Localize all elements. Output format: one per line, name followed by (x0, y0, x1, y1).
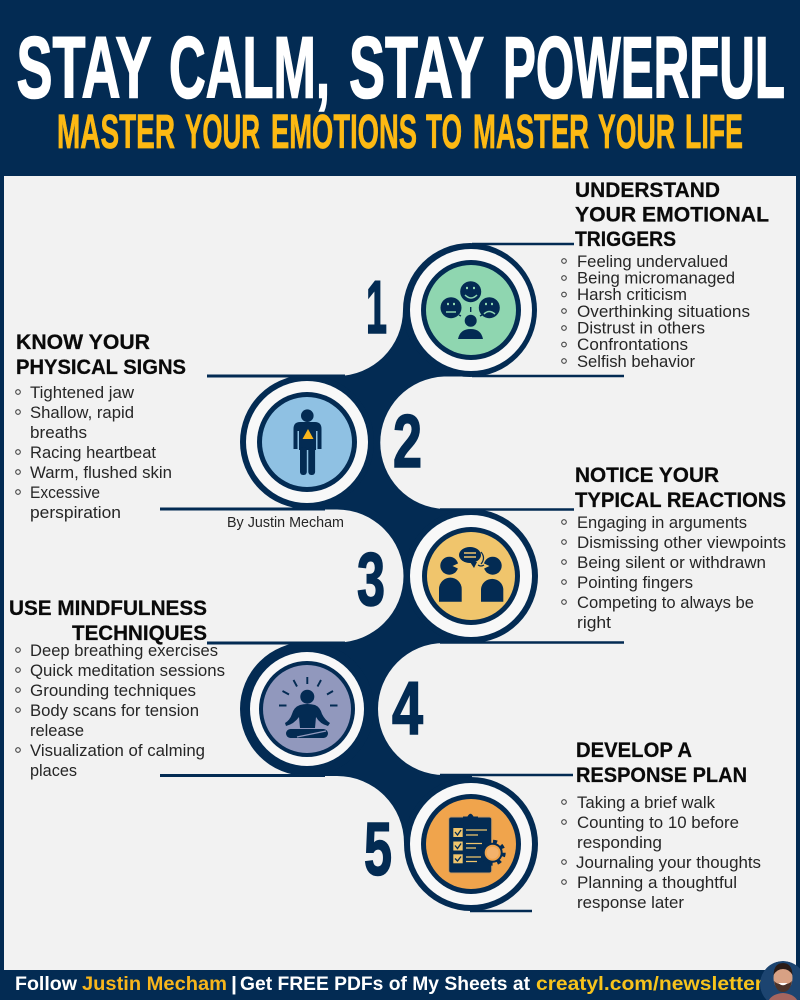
list: typical reactions: Dismissing other viewpoints (577, 534, 786, 552)
list: physical signs (16, 384, 172, 522)
list: typical reactions: Competing to always be (577, 594, 754, 612)
step 5 medallion (404, 777, 538, 911)
heading: understand your emotional triggers (575, 179, 769, 251)
heading: use mindfulness techniques: TECHNIQUES (72, 622, 207, 645)
serpentine connector (5, 244, 795, 911)
heading: notice your typical reactions: TYPICAL REACTIONS (575, 489, 786, 512)
list: physical signs: breaths (30, 424, 87, 442)
number 3: 3 (357, 537, 385, 621)
heading: use mindfulness techniques: USE MINDFULNESS (9, 597, 207, 620)
number 4: 4 (392, 666, 423, 750)
list: typical reactions: right (577, 614, 611, 632)
number 2: 2 (393, 399, 422, 483)
title (16, 20, 785, 116)
heading: understand your emotional triggers: TRIGGERS (575, 228, 676, 251)
main panel background (4, 176, 796, 970)
list: mindfulness techniques: Grounding techniques (30, 682, 196, 700)
footer call to action: Justin Mecham (82, 973, 227, 995)
subtitle: EMOTIONS (271, 106, 417, 159)
step 4 medallion (240, 642, 374, 776)
list: typical reactions: Engaging in arguments (577, 514, 747, 532)
author avatar (760, 961, 800, 1000)
list: emotional triggers: Confrontations (577, 336, 688, 354)
list: physical signs: Excessive (30, 484, 100, 502)
list: emotional triggers: Harsh criticism (577, 286, 687, 304)
subtitle: MASTER (57, 106, 175, 159)
footer call to action: creatyl.com/newsletter (536, 973, 763, 995)
icon: meditating figure (279, 677, 338, 738)
footer call to action: Follow (15, 973, 78, 995)
list: mindfulness techniques: Quick meditation sessions (30, 662, 225, 680)
subtitle: MASTER (473, 106, 589, 159)
subtitle (57, 106, 743, 159)
list: emotional triggers: Selfish behavior (577, 353, 696, 371)
subtitle: YOUR (185, 106, 260, 159)
list: mindfulness techniques (16, 642, 225, 780)
list: response plan: Planning a thoughtful (577, 874, 737, 892)
footer call to action (15, 973, 763, 995)
title: STAY (349, 20, 484, 116)
list: typical reactions: Pointing fingers (577, 574, 693, 592)
list: mindfulness techniques: Deep breathing exercises (30, 642, 218, 660)
heading: know your physical signs: PHYSICAL SIGNS (16, 356, 186, 379)
list: response plan: Taking a brief walk (577, 794, 716, 812)
list: emotional triggers: Distrust in others (577, 320, 705, 338)
subtitle: TO (426, 106, 462, 159)
list: mindfulness techniques: release (30, 722, 84, 740)
step 2 medallion (240, 375, 374, 509)
list: emotional triggers: Overthinking situations (577, 303, 750, 321)
heading: use mindfulness techniques (9, 597, 207, 645)
list: typical reactions: Being silent or withdrawn (577, 554, 766, 572)
list: emotional triggers (562, 253, 750, 371)
subtitle: YOUR (598, 106, 675, 159)
icon: two people talking (439, 547, 503, 602)
footer call to action: | (231, 973, 237, 995)
heading: develop a response plan: RESPONSE PLAN (576, 764, 747, 787)
title: STAY (16, 20, 152, 116)
number 1: 1 (366, 265, 387, 349)
heading: know your physical signs: KNOW YOUR (16, 331, 150, 354)
footer call to action: Get FREE PDFs of My Sheets at (240, 973, 530, 995)
heading: understand your emotional triggers: YOUR EMOTIONAL (575, 204, 769, 226)
heading: develop a response plan (576, 739, 747, 787)
heading: develop a response plan: DEVELOP A (576, 739, 692, 762)
list: physical signs: Racing heartbeat (30, 444, 156, 462)
list: response plan: response later (577, 894, 685, 912)
heading: know your physical signs (16, 331, 186, 379)
step 3 medallion (404, 509, 538, 643)
title: CALM, (169, 20, 330, 116)
icon: faces and person (440, 281, 500, 339)
icon: checklist clipboard and gear (449, 814, 504, 873)
list: response plan: responding (577, 834, 662, 852)
byline: By Justin Mecham (227, 515, 344, 531)
list: typical reactions (562, 514, 786, 632)
heading: notice your typical reactions: NOTICE YOUR (575, 464, 719, 487)
list: mindfulness techniques: places (30, 762, 77, 780)
list: physical signs: Tightened jaw (30, 384, 134, 402)
heading: understand your emotional triggers: UNDERSTAND (575, 179, 720, 202)
number 5: 5 (364, 807, 392, 891)
list: response plan (562, 794, 761, 912)
list: physical signs: perspiration (30, 504, 121, 522)
list: emotional triggers: Feeling undervalued (577, 253, 728, 271)
list: response plan: Journaling your thoughts (576, 854, 761, 872)
list: physical signs: Shallow, rapid (30, 404, 134, 422)
subtitle: LIFE (685, 106, 743, 159)
list: mindfulness techniques: Body scans for tension (30, 702, 199, 720)
icon: body with warning sign (294, 409, 322, 475)
list: physical signs: Warm, flushed skin (30, 464, 172, 482)
step 1 medallion (403, 243, 537, 377)
list: emotional triggers: Being micromanaged (577, 270, 735, 288)
list: mindfulness techniques: Visualization of calming (30, 742, 205, 760)
list: response plan: Counting to 10 before (577, 814, 739, 832)
heading: notice your typical reactions (575, 464, 786, 512)
